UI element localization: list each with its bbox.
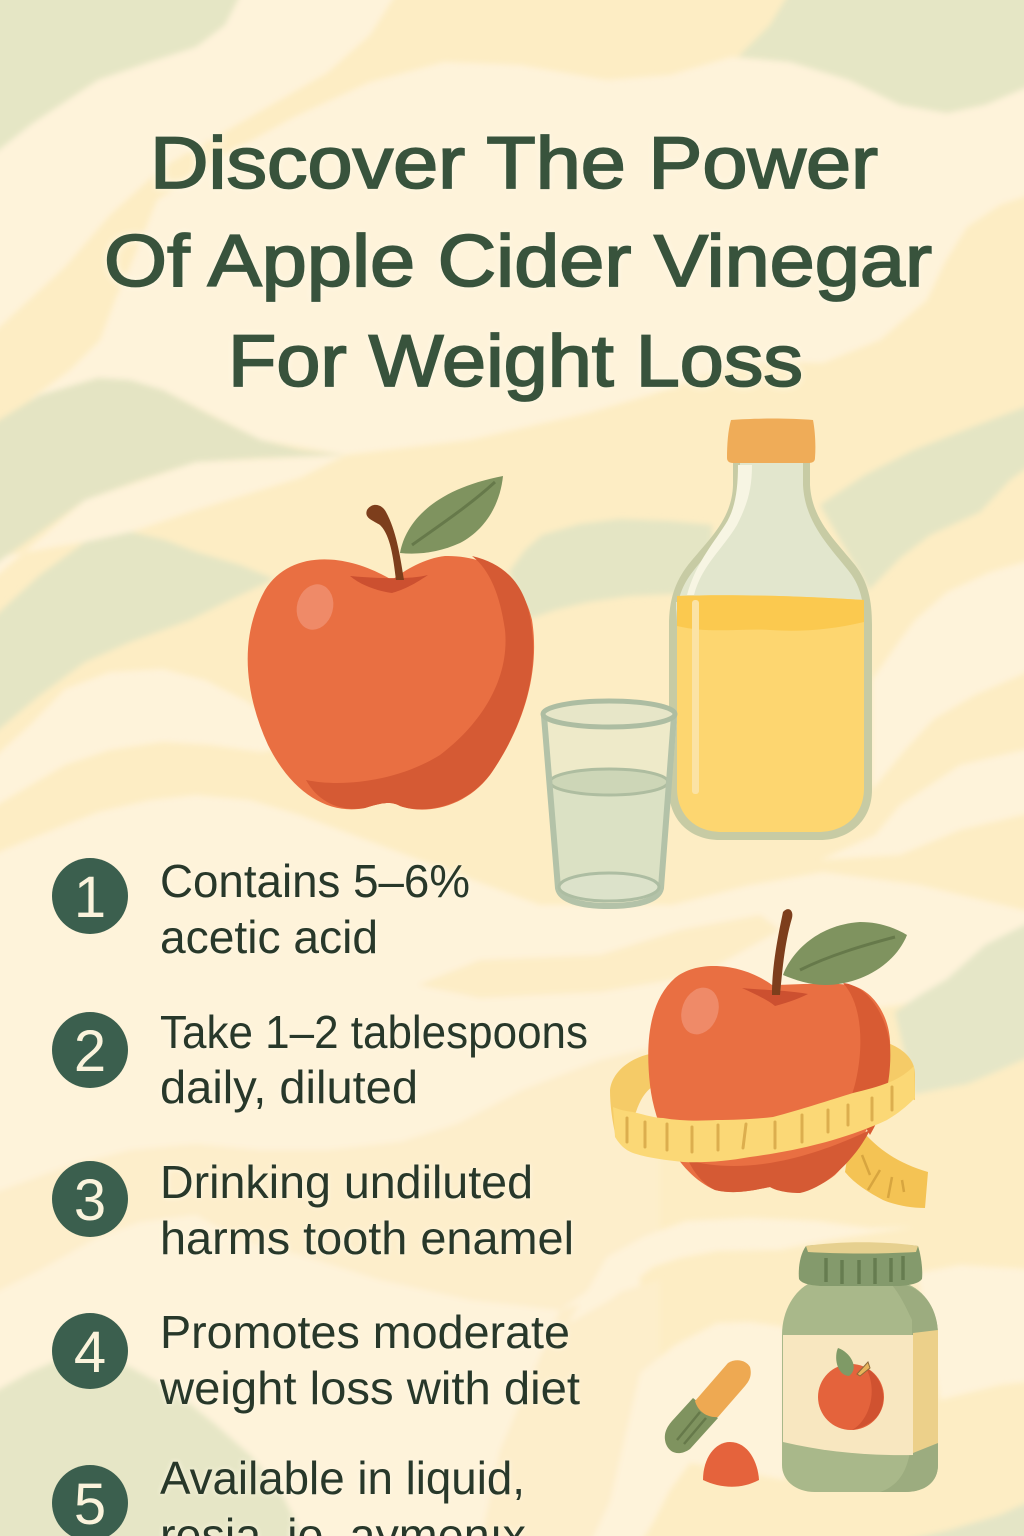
list item 3: harms tooth enamel xyxy=(160,1212,574,1264)
list item 3 xyxy=(52,1156,574,1264)
yellow patches in list region xyxy=(418,915,780,998)
list item 3: 3 xyxy=(74,1168,106,1233)
list item 5 xyxy=(52,1452,526,1536)
pale stripes near jar xyxy=(568,1218,914,1324)
list item 5: Available in liquid, xyxy=(160,1452,525,1504)
illustration: glass of water xyxy=(541,701,677,909)
title: Discover The Power xyxy=(150,123,878,204)
tape front band xyxy=(613,1066,915,1162)
stem and leaf xyxy=(772,909,792,995)
jar body xyxy=(782,1283,938,1492)
title xyxy=(104,123,932,402)
jar cap xyxy=(799,1243,922,1286)
list item 4: Promotes moderate xyxy=(160,1306,570,1358)
list item 5: 5 xyxy=(74,1472,106,1536)
list item 1: acetic acid xyxy=(160,911,378,963)
title: For Weight Loss xyxy=(228,321,803,402)
illustration: apple with measuring tape xyxy=(610,909,928,1208)
list item 3: Drinking undiluted xyxy=(160,1156,533,1208)
list item 4 xyxy=(52,1306,580,1414)
list item 1: Contains 5–6% xyxy=(160,855,470,907)
list item 1 xyxy=(52,855,470,963)
jar label xyxy=(783,1335,913,1455)
apple body xyxy=(648,966,890,1192)
illustration: red apple xyxy=(248,476,534,810)
list item 2: 2 xyxy=(74,1019,106,1084)
illustration: vinegar bottle xyxy=(669,418,872,840)
label apple xyxy=(818,1364,884,1430)
list item 2 xyxy=(52,1006,588,1113)
pale areas xyxy=(0,0,405,345)
illustration: supplement jar with capsule and gummy xyxy=(665,1242,938,1492)
list item 1: 1 xyxy=(74,865,106,930)
green shapes xyxy=(0,0,248,165)
list item 4: weight loss with diet xyxy=(159,1362,580,1414)
tape tail xyxy=(845,1136,928,1208)
gummy xyxy=(703,1442,759,1487)
list item 2: Take 1–2 tablespoons xyxy=(160,1006,588,1058)
list item 2: daily, diluted xyxy=(160,1061,418,1113)
tape back loop xyxy=(610,1054,652,1138)
capsule xyxy=(665,1398,718,1453)
title: Of Apple Cider Vinegar xyxy=(104,221,932,302)
list item 4: 4 xyxy=(74,1320,106,1385)
